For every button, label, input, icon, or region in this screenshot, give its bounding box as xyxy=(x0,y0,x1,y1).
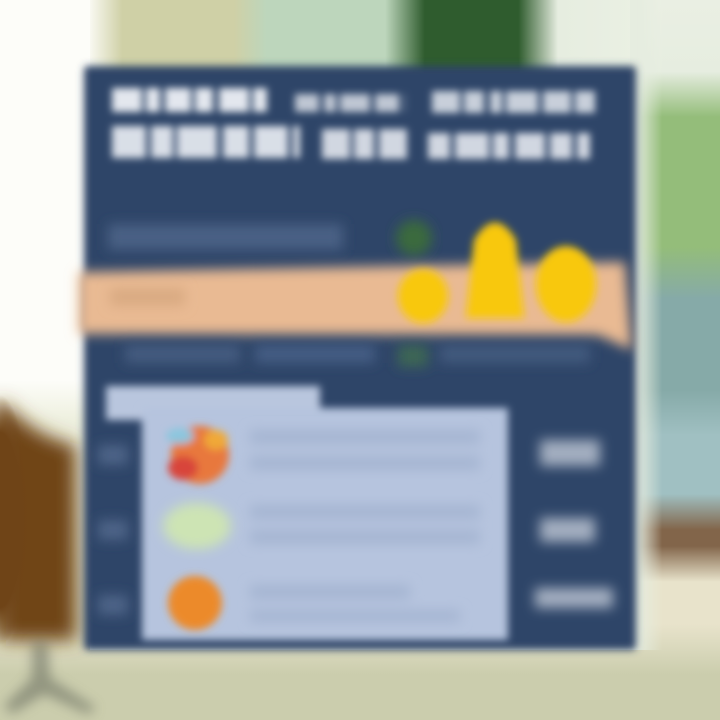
right column values xyxy=(535,440,613,608)
chair xyxy=(0,395,96,714)
icon: orange circle xyxy=(168,576,222,630)
icon: green leaf card xyxy=(163,503,231,549)
stats row xyxy=(125,345,590,367)
title xyxy=(112,100,600,146)
icon: green leaf xyxy=(396,220,432,256)
board background xyxy=(84,66,636,650)
left column markers xyxy=(98,445,128,615)
panel tab xyxy=(106,386,320,420)
icons: yellow coin stacks xyxy=(398,222,596,323)
subtitle strip xyxy=(108,224,343,250)
panel rows text xyxy=(250,430,480,622)
icon: pie chart xyxy=(166,426,229,484)
band label xyxy=(110,288,185,306)
peach band xyxy=(78,262,632,350)
panel: light list xyxy=(142,408,508,640)
infographic board xyxy=(78,66,636,650)
